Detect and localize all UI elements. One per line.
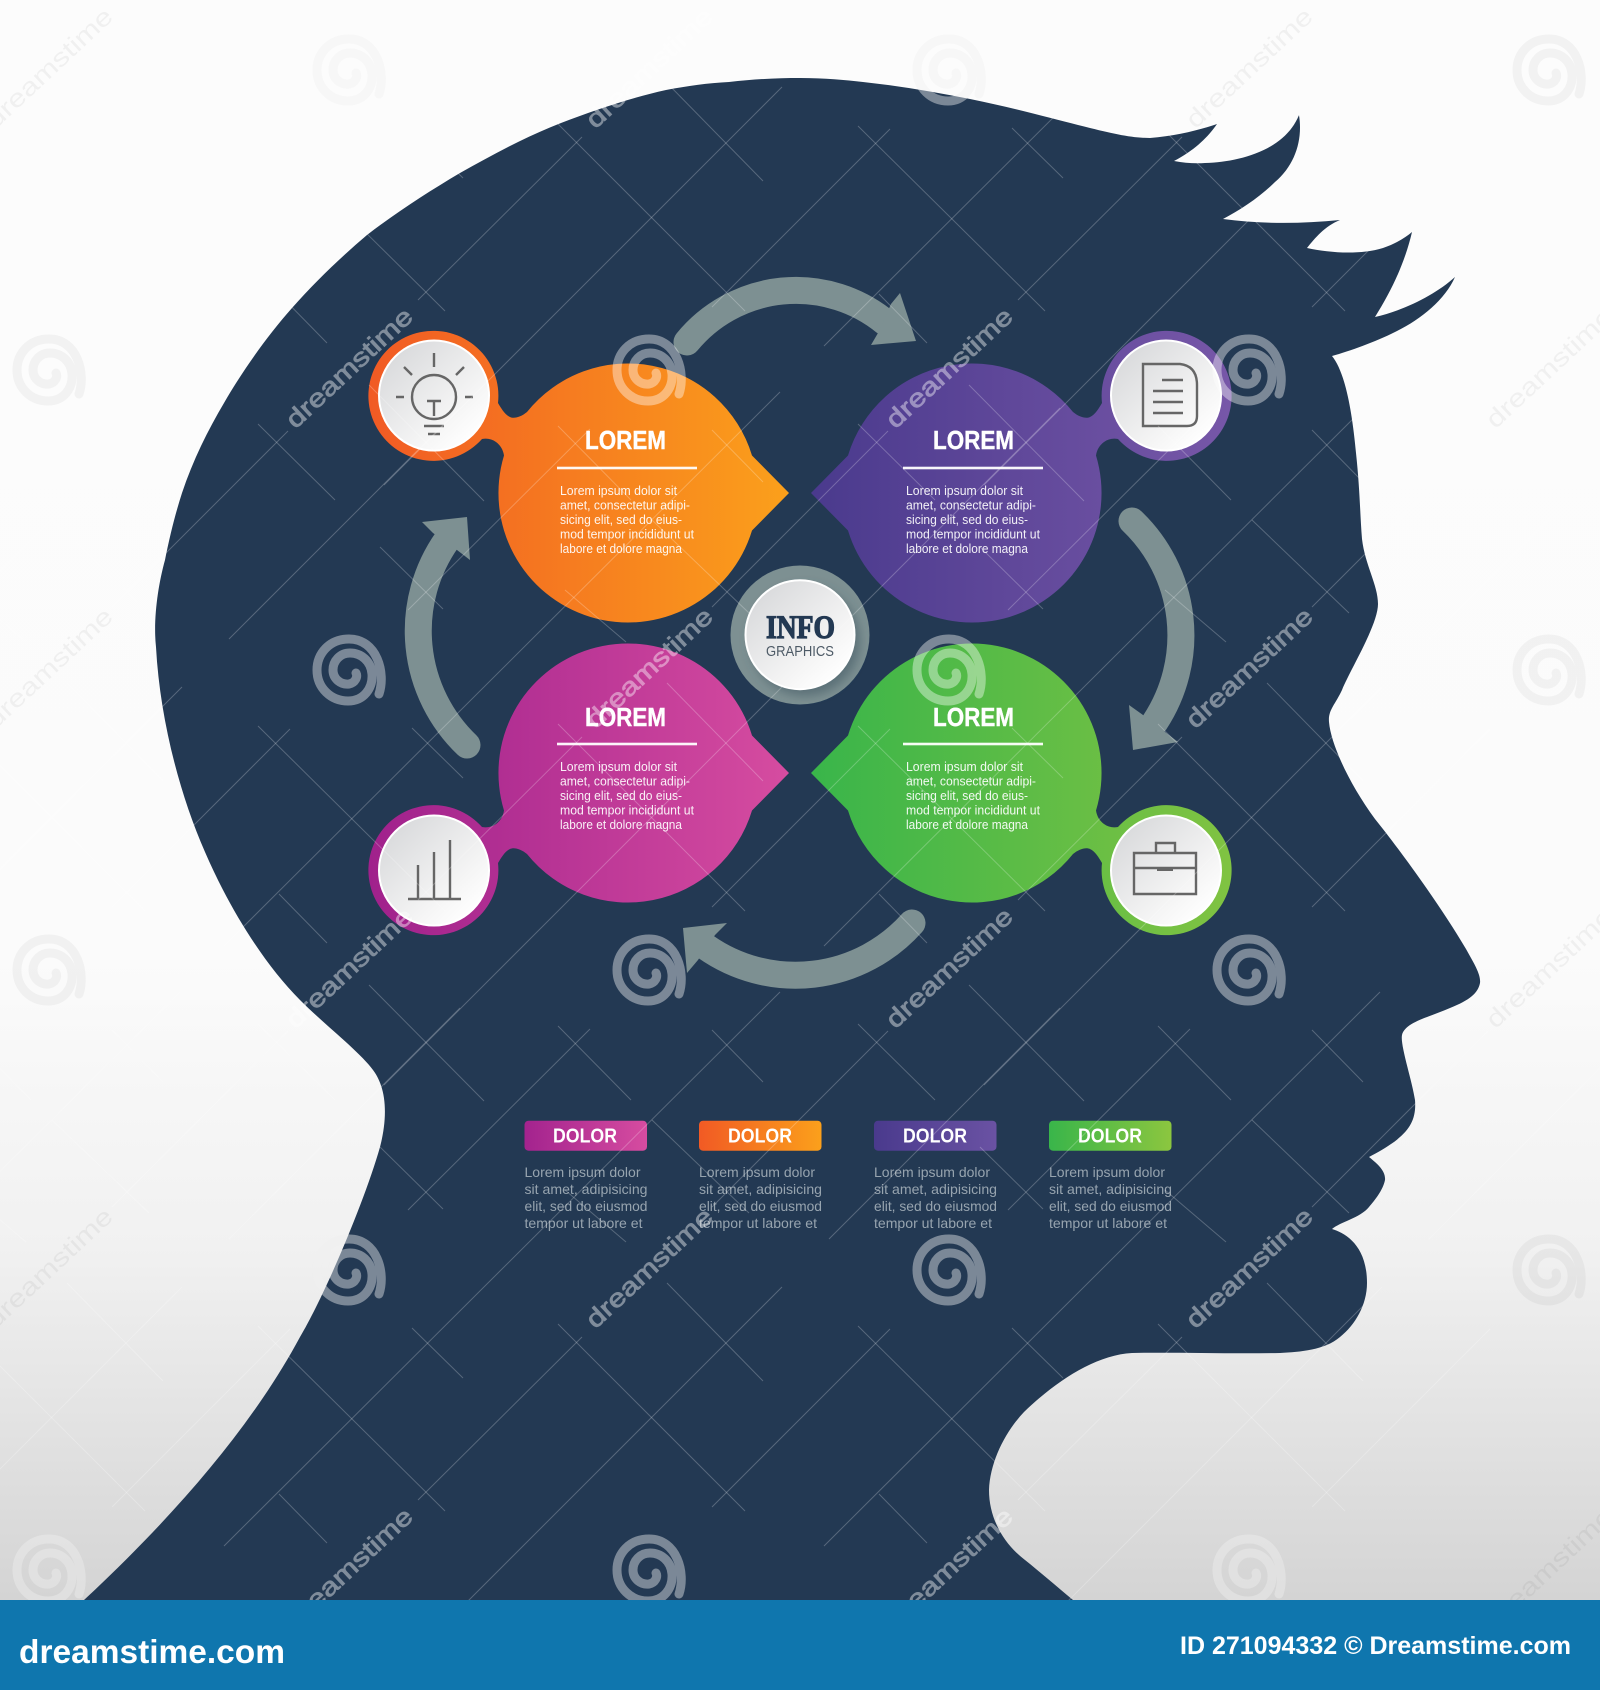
faint watermark text on background: dreamstime [1180, 2, 1319, 134]
legend: magenta: DOLOR [553, 1126, 617, 1148]
text: green: Lorem ipsum dolor sit [906, 760, 1024, 774]
text: green: sicing elit, sed do eius- [906, 789, 1028, 803]
arrow: top [687, 290, 916, 345]
text: purple: Lorem ipsum dolor sit [906, 484, 1024, 498]
heading: purple: LOREM [933, 425, 1014, 455]
text: green: mod tempor incididunt ut [906, 804, 1041, 818]
heading: magenta: LOREM [585, 702, 666, 732]
text: magenta: mod tempor incididunt ut [560, 804, 695, 818]
legend: purple [874, 1121, 997, 1231]
legend text: purple: tempor ut labore et [874, 1215, 992, 1231]
badge title: INFO [766, 610, 835, 646]
text: green: labore et dolore magna [906, 818, 1028, 832]
legend: magenta [524, 1121, 648, 1231]
legend text: green: Lorem ipsum dolor [1049, 1164, 1165, 1180]
text: orange: mod tempor incididunt ut [560, 528, 695, 542]
legend text: orange: Lorem ipsum dolor [699, 1164, 815, 1180]
watermark text: dreamstime [280, 902, 419, 1034]
bubble: green [811, 643, 1232, 935]
text: purple: mod tempor incididunt ut [906, 528, 1041, 542]
legend text: orange [699, 1164, 822, 1231]
watermark text: dreamstime [1180, 1202, 1319, 1334]
icon: light bulb [396, 353, 473, 434]
watermark text: dreamstime [280, 302, 419, 434]
text: orange: amet, consectetur adipi- [560, 498, 690, 512]
faint watermark text on background: dreamstime [1480, 902, 1600, 1034]
badge subtitle: GRAPHICS [766, 643, 834, 660]
text: purple: amet, consectetur adipi- [906, 498, 1036, 512]
watermark text: dreamstime [880, 302, 1019, 434]
text: magenta: labore et dolore magna [560, 818, 682, 832]
legend text: purple: sit amet, adipisicing [874, 1181, 997, 1197]
legend text: purple [874, 1164, 997, 1231]
head silhouette [84, 78, 1480, 1600]
text: orange: labore et dolore magna [560, 542, 682, 556]
text: magenta: amet, consectetur adipi- [560, 774, 690, 788]
footer logo: dreamstime.com [19, 1633, 285, 1670]
watermark text: dreamstime [580, 2, 719, 134]
text: green: amet, consectetur adipi- [906, 774, 1036, 788]
legend text: magenta: Lorem ipsum dolor [524, 1164, 641, 1180]
arrow: bottom [683, 923, 912, 975]
legend text: green: elit, sed do eiusmod [1049, 1198, 1172, 1214]
center badge [730, 566, 870, 704]
legend: green: DOLOR [1078, 1126, 1142, 1148]
watermark text: dreamstime [580, 1202, 719, 1334]
icon: document [1143, 364, 1197, 426]
footer banner [0, 1600, 1600, 1690]
bubble: purple [811, 331, 1232, 623]
watermark text [280, 2, 1319, 1634]
legend text: magenta [524, 1164, 648, 1231]
arrow: right [1129, 521, 1181, 750]
text: purple: sicing elit, sed do eius- [906, 513, 1028, 527]
watermark text: dreamstime [280, 1502, 419, 1634]
legend text: orange: elit, sed do eiusmod [699, 1198, 822, 1214]
text: green [906, 760, 1041, 832]
legend text: green: tempor ut labore et [1049, 1215, 1167, 1231]
legend text: green [1049, 1164, 1172, 1231]
watermark text: dreamstime [580, 602, 719, 734]
legend: green [1049, 1121, 1172, 1231]
legend text: magenta: elit, sed do eiusmod [524, 1198, 648, 1214]
icon: briefcase [1134, 843, 1196, 894]
text: purple: labore et dolore magna [906, 542, 1028, 556]
legend text: purple: elit, sed do eiusmod [874, 1198, 997, 1214]
legend text: magenta: sit amet, adipisicing [524, 1181, 648, 1197]
legend: orange: DOLOR [728, 1126, 792, 1148]
footer id: ID 271094332 © Dreamstime.com [1180, 1632, 1571, 1660]
heading: green: LOREM [933, 702, 1014, 732]
text: orange [560, 484, 695, 556]
legend text: green: sit amet, adipisicing [1049, 1181, 1172, 1197]
heading: orange: LOREM [585, 425, 666, 455]
arrow: left [418, 517, 470, 745]
text: magenta: Lorem ipsum dolor sit [560, 760, 678, 774]
icon: bar chart [408, 840, 461, 899]
legend text: orange: sit amet, adipisicing [699, 1181, 822, 1197]
legend: purple: DOLOR [903, 1126, 967, 1148]
text: magenta: sicing elit, sed do eius- [560, 789, 682, 803]
text: orange: sicing elit, sed do eius- [560, 513, 682, 527]
bubble: magenta [368, 643, 789, 935]
faint watermark text on background: dreamstime [1480, 1502, 1600, 1634]
faint watermark text on background: dreamstime [1480, 302, 1600, 434]
text: purple [906, 484, 1041, 556]
bubble: orange [368, 331, 789, 623]
watermark text: dreamstime [880, 1502, 1019, 1634]
legend text: orange: tempor ut labore et [699, 1215, 817, 1231]
legend: orange [699, 1121, 822, 1231]
watermark text: dreamstime [1180, 602, 1319, 734]
watermark text: dreamstime [880, 902, 1019, 1034]
legend text: purple: Lorem ipsum dolor [874, 1164, 990, 1180]
legend text: magenta: tempor ut labore et [524, 1215, 643, 1231]
text: magenta [560, 760, 695, 832]
text: orange: Lorem ipsum dolor sit [560, 484, 678, 498]
